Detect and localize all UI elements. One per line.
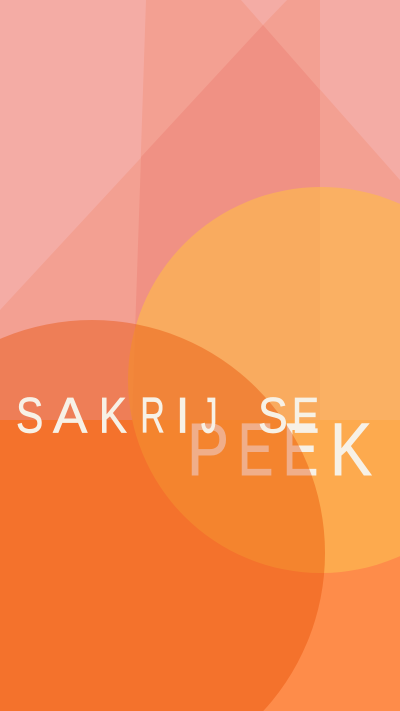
text: PEEK: P xyxy=(187,408,229,491)
text: SAKRIJ SE: S xyxy=(16,388,43,443)
shape: central dark triangle xyxy=(132,25,320,420)
shape: top wedge xyxy=(241,0,287,25)
text: PEEK: K xyxy=(330,408,372,491)
text: SAKRIJ SE: I xyxy=(176,388,190,444)
shape: red circle xyxy=(0,320,325,711)
shape: vertical band upper left xyxy=(132,0,320,420)
background: pink upper panel xyxy=(0,0,400,420)
text: SAKRIJ SE: R xyxy=(140,388,165,444)
text: SAKRIJ SE: K xyxy=(99,387,127,443)
text: SAKRIJ SE xyxy=(16,387,319,444)
shape: left triangle band xyxy=(0,0,400,420)
text: SAKRIJ SE: S xyxy=(258,388,288,444)
text: SAKRIJ SE: E xyxy=(292,388,319,443)
text: PEEK: E xyxy=(238,408,273,491)
text: SAKRIJ SE: J xyxy=(201,388,218,443)
text: PEEK xyxy=(187,408,372,491)
background: orange lower panel xyxy=(0,420,400,711)
shape: yellow circle xyxy=(128,187,400,573)
text: SAKRIJ SE: A xyxy=(53,387,87,443)
text: PEEK: E xyxy=(283,408,318,491)
